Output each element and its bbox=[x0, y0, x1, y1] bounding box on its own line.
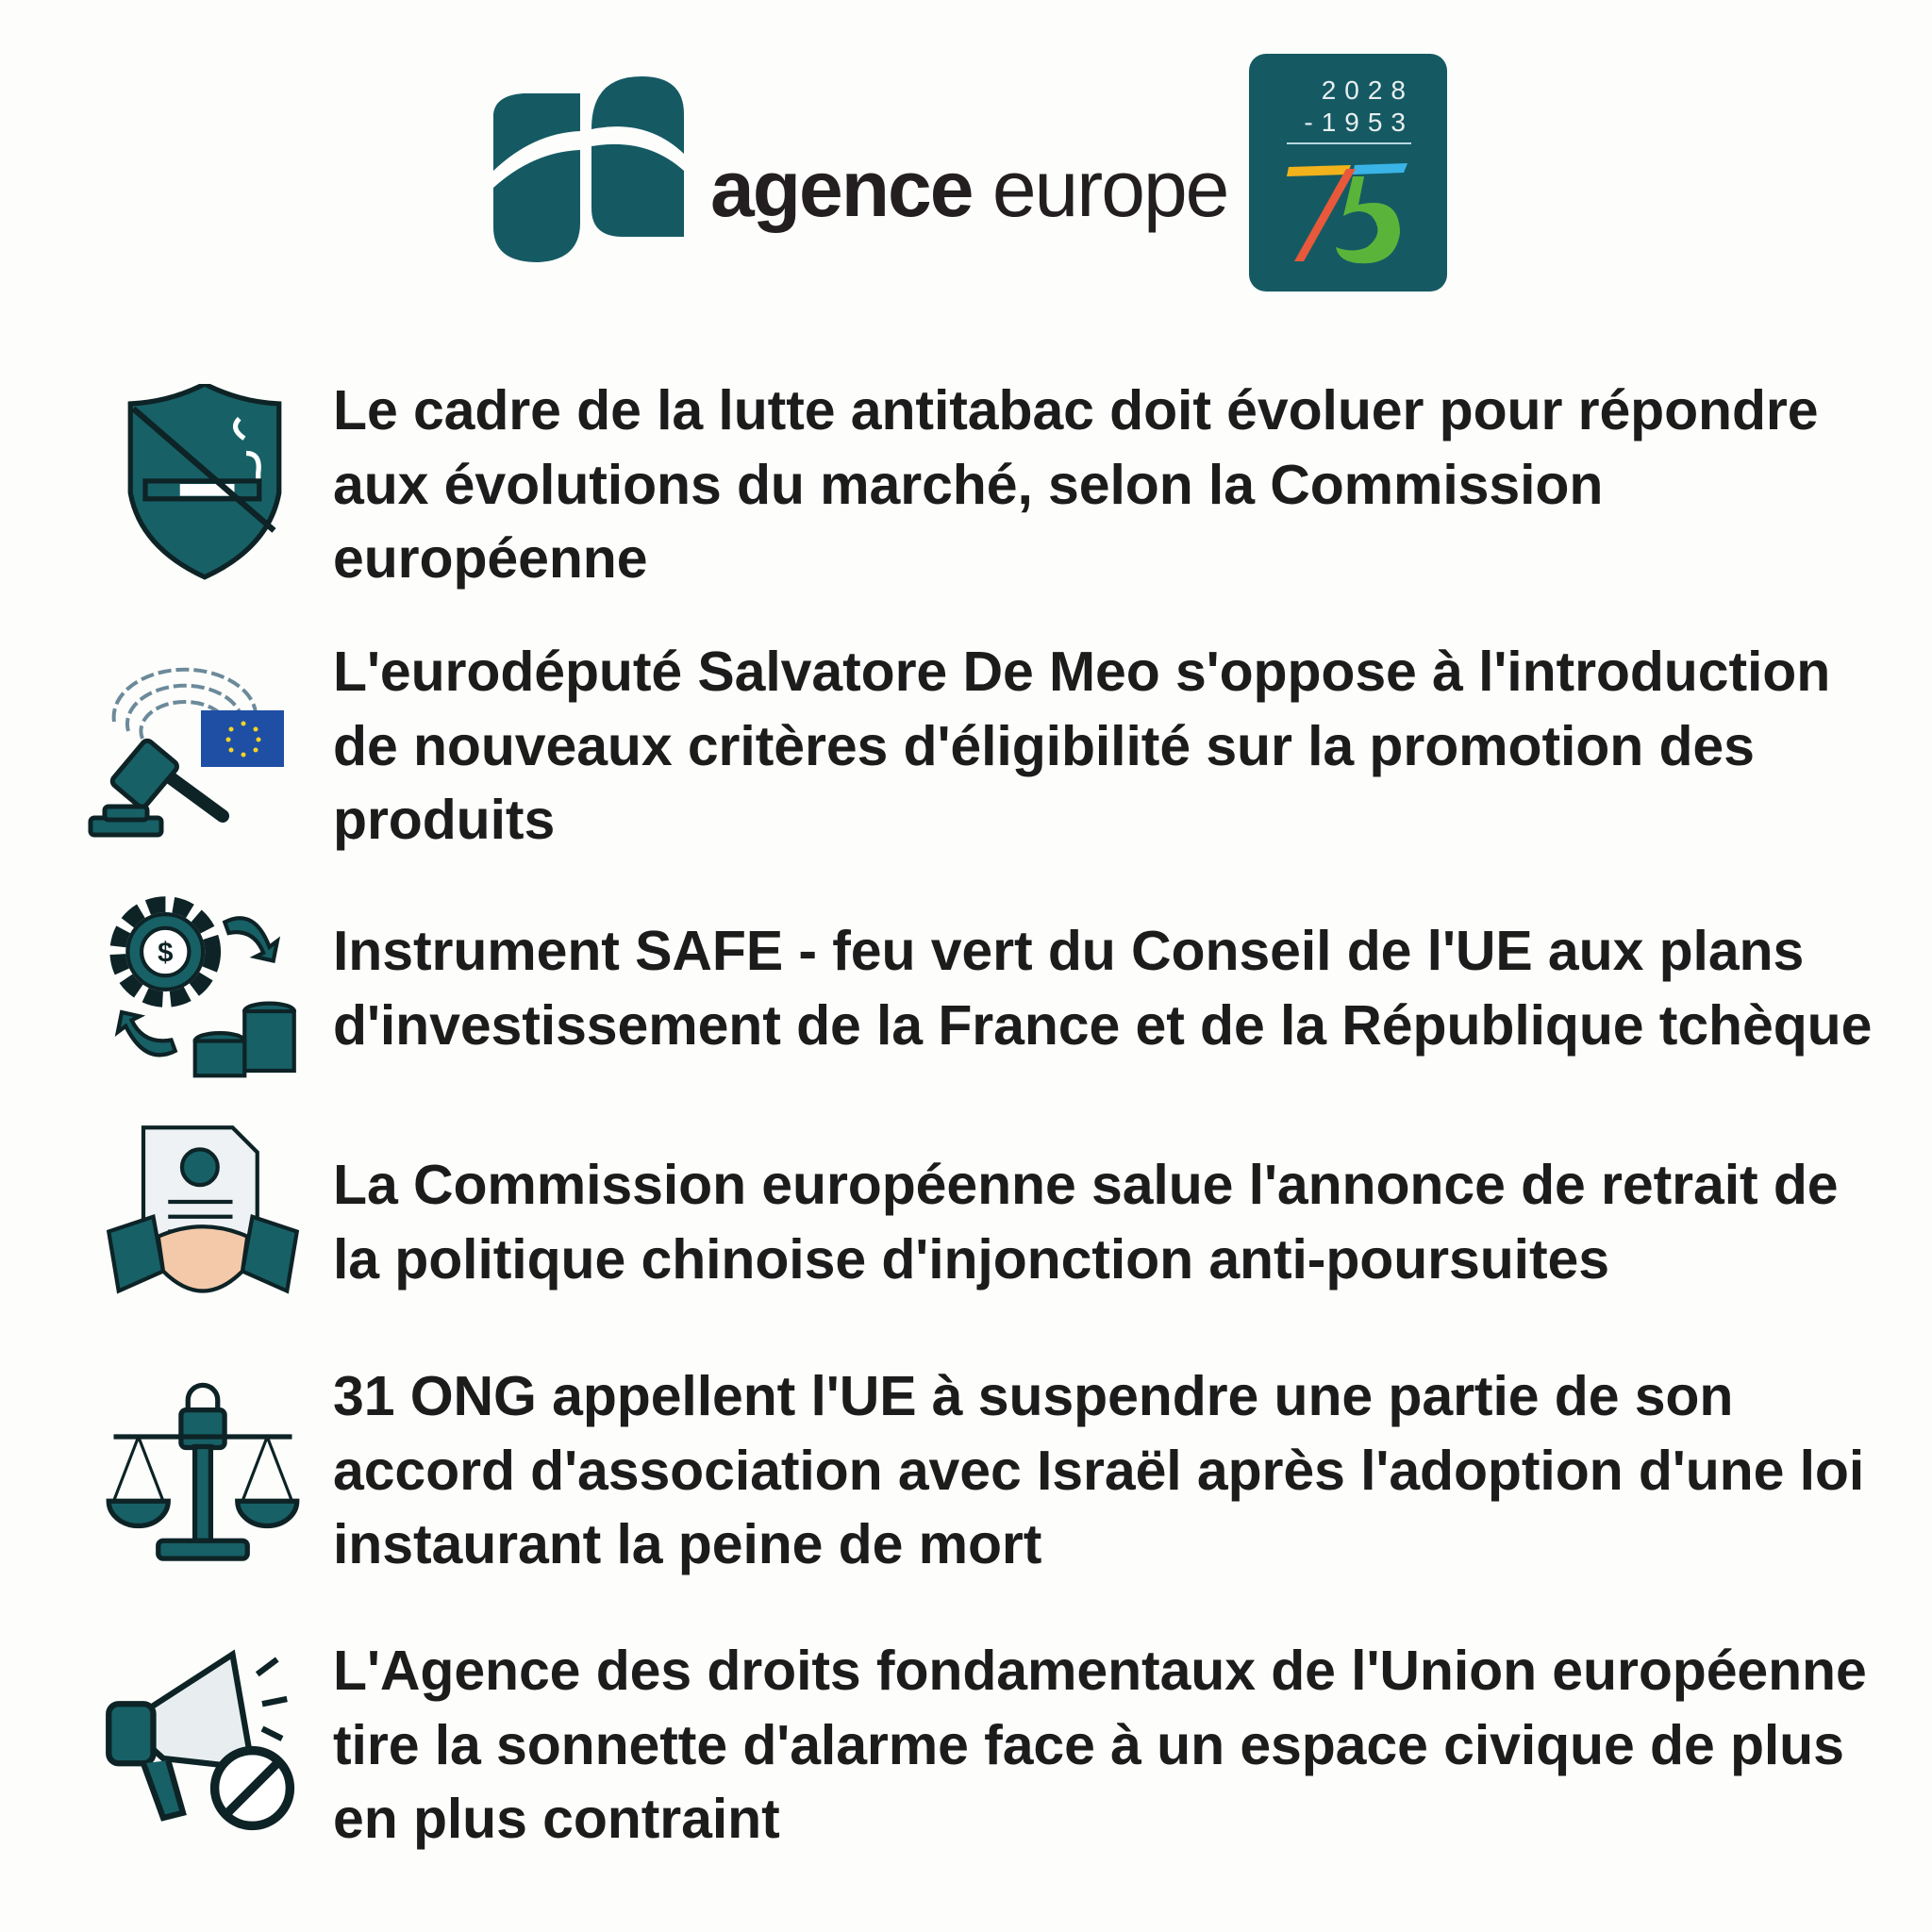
logo mark bbox=[493, 76, 684, 262]
text block 1: Le cadre de la lutte antitabac doit évoluer pour répondre bbox=[333, 379, 1819, 441]
text block 5: accord d'association avec Israël après l'adoption d'une loi bbox=[333, 1440, 1864, 1502]
text block 3: d'investissement de la France et de la République tchèque bbox=[333, 994, 1872, 1057]
text block 1 bbox=[333, 379, 1819, 590]
text block 6: en plus contraint bbox=[333, 1788, 780, 1850]
text block 1: européenne bbox=[333, 527, 647, 590]
text block 6 bbox=[333, 1640, 1867, 1850]
logo wordmark: agence europe bbox=[710, 144, 1227, 233]
text block 2: produits bbox=[333, 789, 555, 851]
icon: scales with padlock bbox=[106, 1383, 300, 1561]
text block 6: tire la sonnette d'alarme face à un espace civique de plus bbox=[333, 1713, 1844, 1775]
icon: no smoking shield bbox=[128, 384, 281, 580]
text block 2: de nouveaux critères d'éligibilité sur la promotion des bbox=[333, 715, 1755, 777]
badge 75 years: 2028 bbox=[1322, 75, 1414, 105]
icon: document and handshake bbox=[106, 1125, 300, 1294]
badge 75 years: -1953 bbox=[1304, 108, 1414, 137]
text block 4: La Commission européenne salue l'annonce de retrait de bbox=[333, 1154, 1838, 1216]
text block 5: instaurant la peine de mort bbox=[333, 1513, 1041, 1575]
text block 6: L'Agence des droits fondamentaux de l'Union européenne bbox=[333, 1640, 1867, 1702]
text block 3 bbox=[333, 920, 1872, 1057]
text block 1: aux évolutions du marché, selon la Commission bbox=[333, 453, 1603, 515]
text block 3: Instrument SAFE - feu vert du Conseil de l'UE aux plans bbox=[333, 920, 1804, 982]
icon: megaphone with prohibition sign bbox=[106, 1649, 294, 1830]
badge 75 years bbox=[1249, 54, 1447, 291]
icon: gavel and EU parliament bbox=[89, 668, 284, 838]
text block 2: L'eurodéputé Salvatore De Meo s'oppose à l'introduction bbox=[333, 641, 1830, 703]
text block 4: la politique chinoise d'injonction anti-poursuites bbox=[333, 1228, 1609, 1291]
icon: gear, coins and arrows bbox=[109, 896, 296, 1077]
text block 5: 31 ONG appellent l'UE à suspendre une partie de son bbox=[333, 1365, 1733, 1427]
text block 4 bbox=[333, 1154, 1838, 1291]
text block 2 bbox=[333, 641, 1830, 851]
icon: gear, coins and arrows: $ bbox=[158, 938, 173, 969]
logo: agence europe bbox=[493, 54, 1447, 291]
text block 5 bbox=[333, 1365, 1864, 1575]
